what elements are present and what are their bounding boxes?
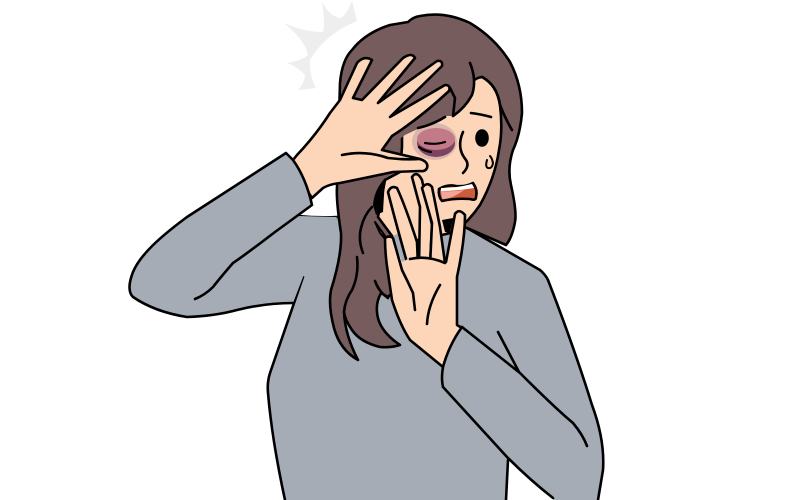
finger: middle: [412, 174, 432, 266]
shirt: right sleeve: [442, 228, 603, 500]
finger: thumb and palm: [385, 211, 465, 367]
face: [378, 77, 501, 240]
hair: front strand over forehead: [385, 60, 474, 150]
hair: strand lines: [344, 63, 512, 312]
icon: impact starburst: [284, 1, 357, 90]
open eye: [476, 130, 488, 146]
hair: [330, 15, 522, 360]
neck shadow: [373, 178, 385, 215]
nose: [460, 132, 467, 173]
closed eye: [425, 142, 445, 144]
shirt: left sleeve outline: [130, 153, 312, 317]
shirt: torso: [268, 216, 603, 500]
face features: [418, 113, 493, 173]
tear: [486, 156, 493, 168]
icon: bruise around eye: [412, 123, 457, 160]
raised hand (front): [385, 174, 465, 367]
eyebrow: [471, 113, 491, 117]
collar: [375, 218, 453, 268]
mouth: [439, 183, 477, 201]
shirt: left sleeve: [130, 153, 337, 317]
finger: ring: [388, 187, 418, 266]
finger: index: [422, 184, 445, 266]
raised hand (shielding head): [293, 55, 450, 198]
shirt: torso outline: [268, 216, 508, 500]
